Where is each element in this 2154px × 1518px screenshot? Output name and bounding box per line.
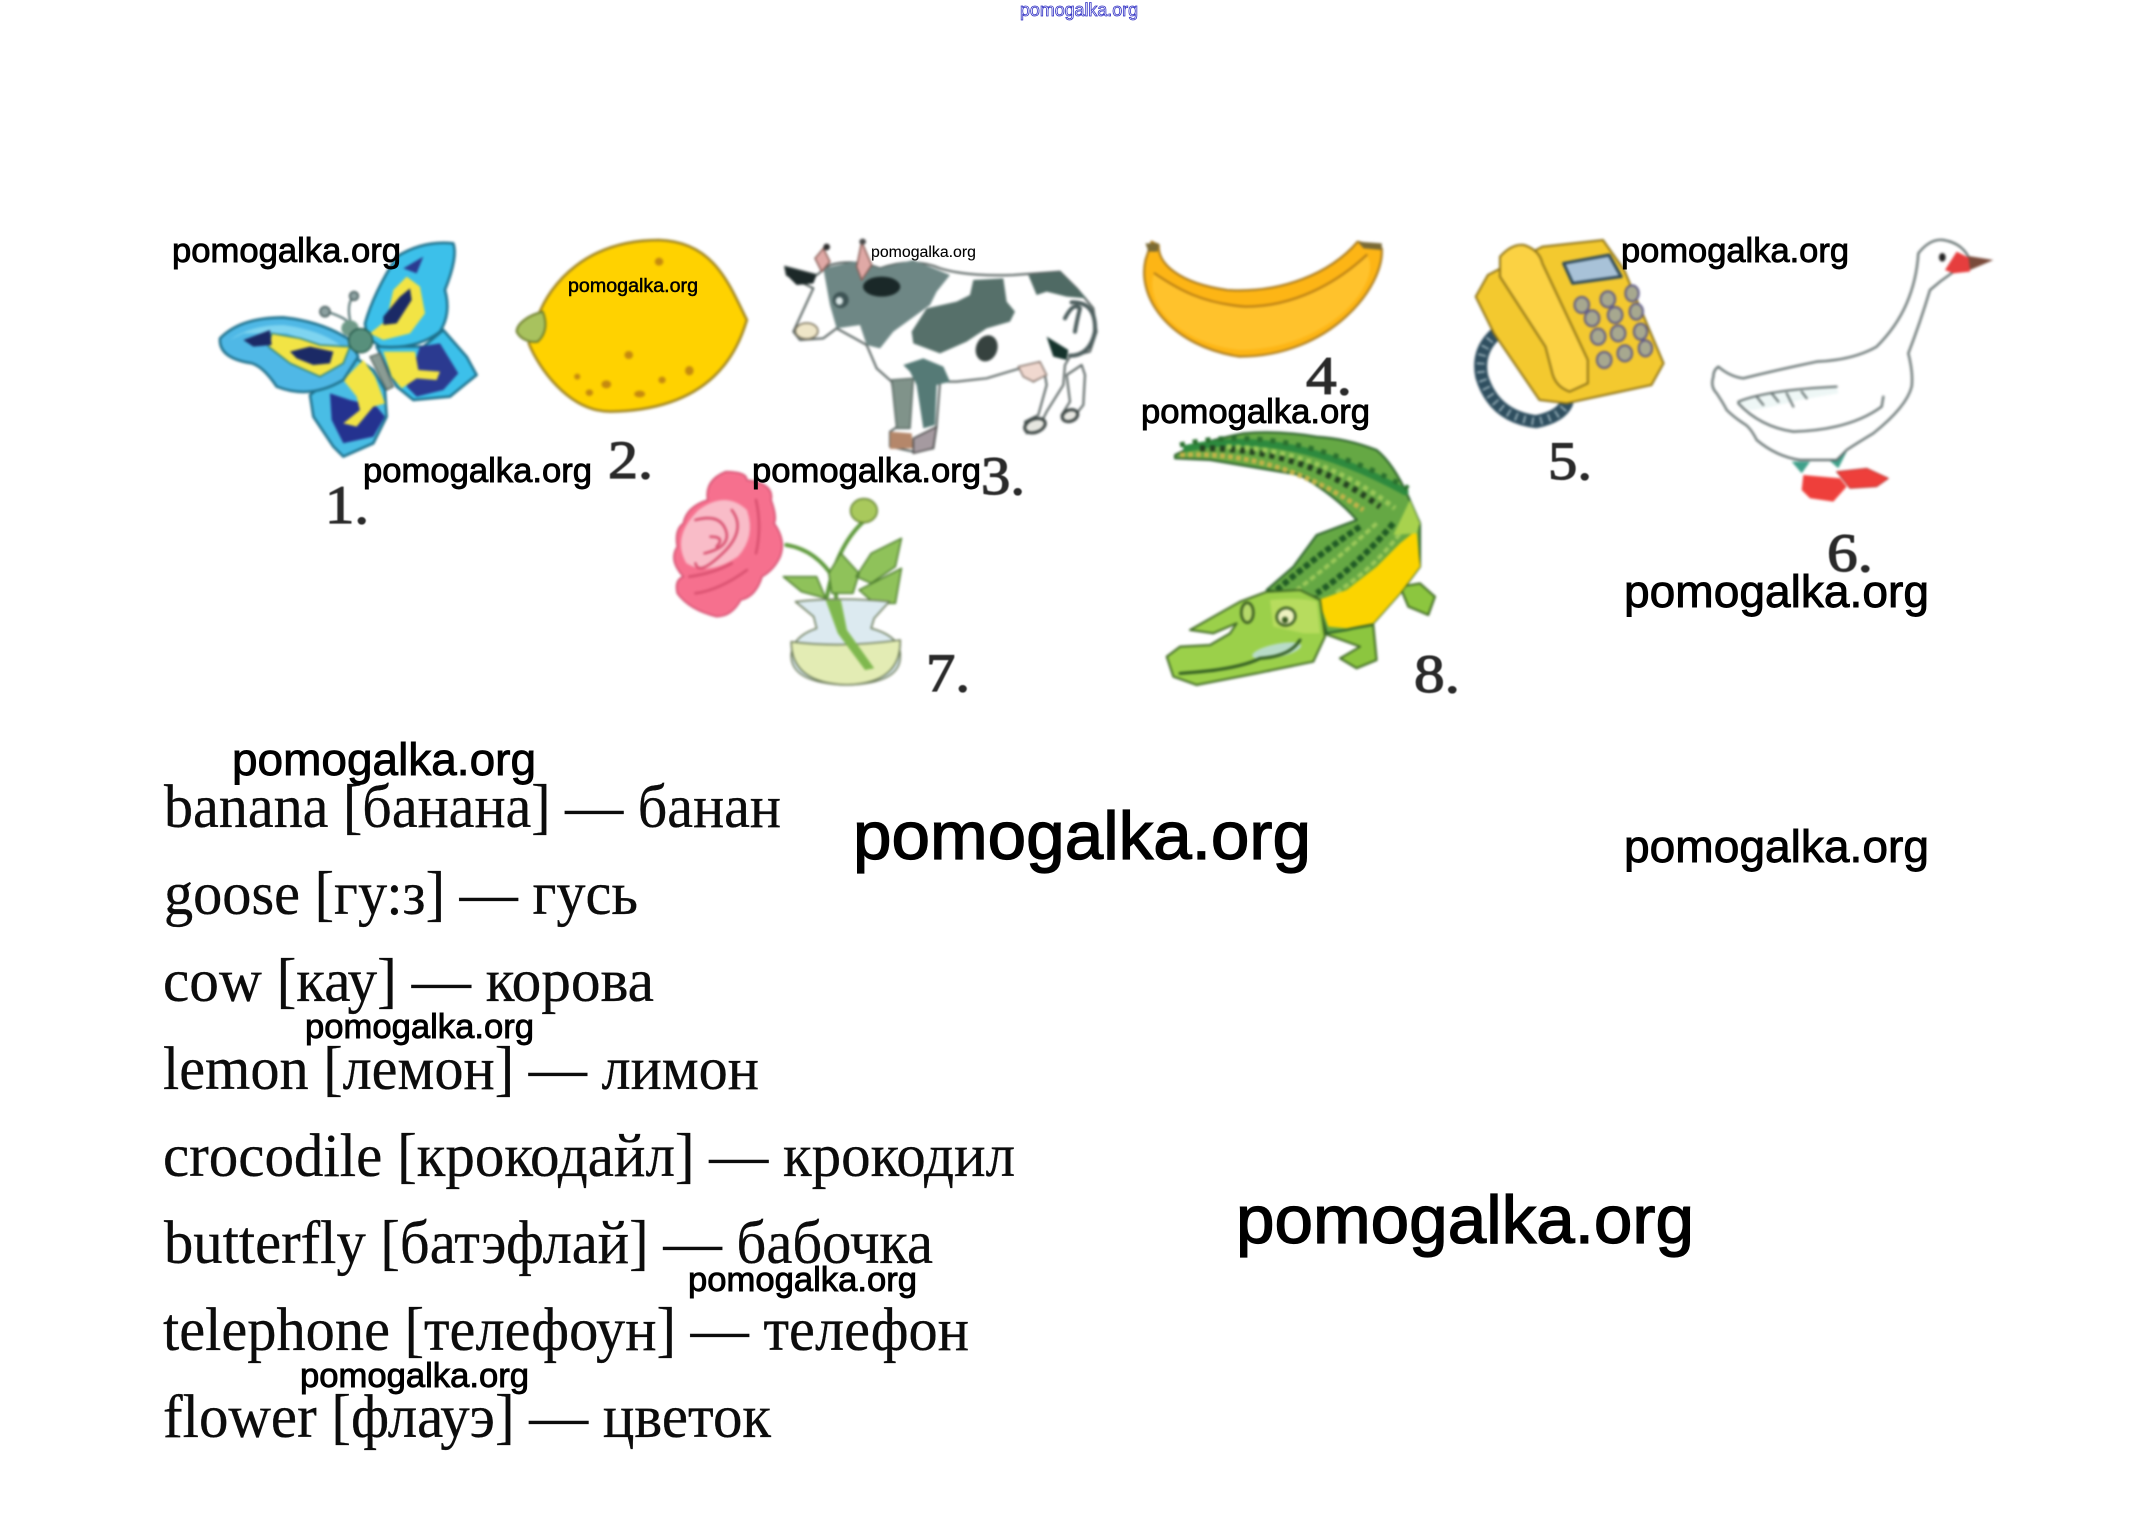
watermark by telephone: pomogalka.org [1621, 232, 1849, 270]
word: flower: flower [флауэ] — цветок [163, 1384, 771, 1451]
top outlined site mark: pomogalka.org [1020, 0, 1138, 20]
vocabulary word list [163, 774, 1015, 1451]
watermark on cow: pomogalka.org [871, 244, 976, 261]
watermark above lemon row: pomogalka.org [305, 1008, 534, 1046]
icon: goose [1712, 240, 1993, 502]
word: butterfly: butterfly [батэфлай] — бабочка [164, 1210, 933, 1277]
number 1: 1. [325, 475, 369, 535]
word: crocodile: crocodile [крокодайл] — крокодил [163, 1123, 1015, 1190]
icon: crocodile [1167, 432, 1435, 685]
watermark right: pomogalka.org [1624, 821, 1929, 872]
icon: cow [785, 239, 1097, 453]
watermark above flower row: pomogalka.org [300, 1357, 529, 1395]
word: telephone: telephone [телефоун] — телефон [163, 1297, 969, 1364]
icon: butterfly [220, 243, 477, 457]
number 3: 3. [981, 446, 1025, 506]
watermark above banana: pomogalka.org [232, 734, 536, 785]
watermark on lemon: pomogalka.org [568, 275, 698, 297]
icon: telephone [1476, 240, 1664, 422]
number labels [325, 346, 1873, 704]
large watermark centre: pomogalka.org [853, 798, 1311, 874]
number 4: 4. [1306, 346, 1352, 406]
watermark by number 3: pomogalka.org [752, 452, 981, 490]
number 2: 2. [608, 430, 653, 490]
watermark by number 2: pomogalka.org [363, 452, 592, 490]
word: lemon: lemon [лемон] — лимон [163, 1036, 759, 1103]
number 5: 5. [1548, 431, 1592, 491]
watermark under number 6: pomogalka.org [1624, 566, 1929, 617]
word: cow: cow [кау] — корова [163, 948, 654, 1015]
icon: flower in a vase [674, 472, 901, 685]
icon: banana [1144, 242, 1382, 357]
illustrations group [220, 239, 1993, 685]
number 6: 6. [1827, 523, 1873, 583]
watermarks [172, 232, 1929, 1395]
icon: lemon [517, 240, 747, 412]
watermark below butterfly row: pomogalka.org [688, 1261, 917, 1299]
number 8: 8. [1414, 644, 1460, 704]
number 7: 7. [926, 643, 970, 703]
large watermark lower right: pomogalka.org [1236, 1182, 1694, 1258]
watermark above crocodile: pomogalka.org [1141, 393, 1370, 431]
word: goose: goose [гу:з] — гусь [164, 861, 638, 928]
watermark over butterfly: pomogalka.org [172, 232, 401, 270]
word: banana: banana [банана] — банан [164, 774, 781, 841]
